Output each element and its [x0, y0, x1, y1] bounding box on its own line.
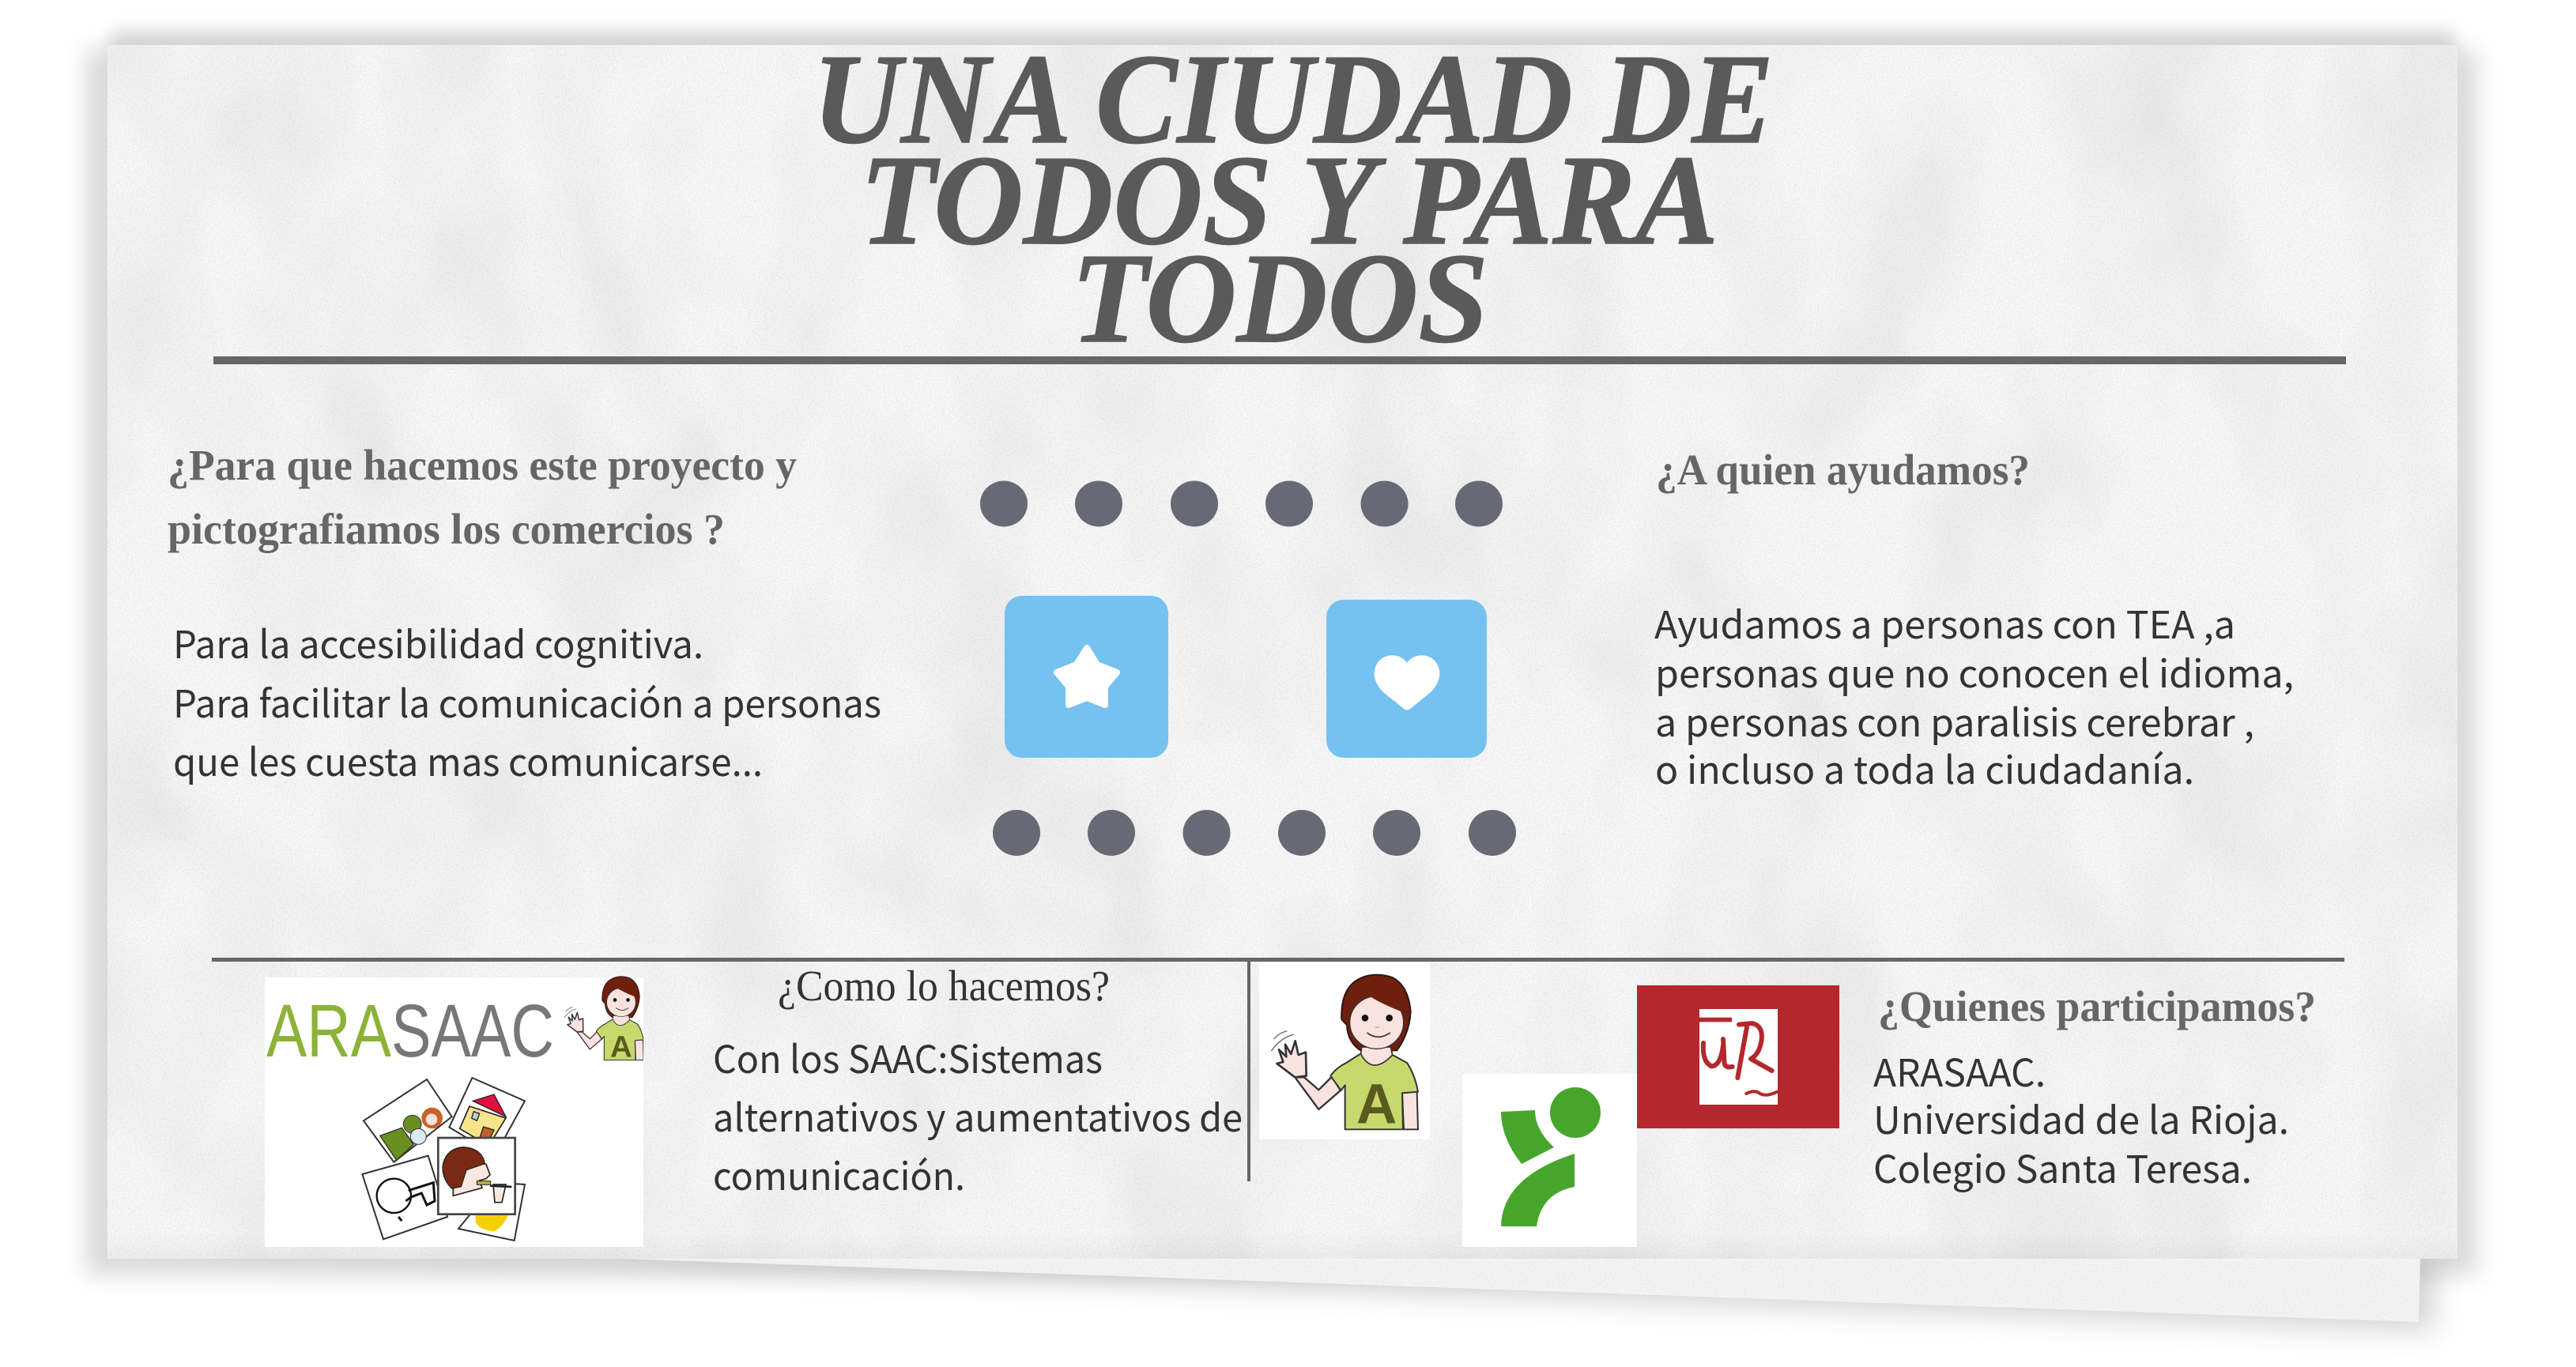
text: purpose body [173, 614, 881, 787]
title: UNA CIUDAD DE [813, 28, 1774, 171]
heading: participants: ¿Quienes participamos? [1878, 982, 2316, 1030]
heading: how we do it: ¿Como lo hacemos? [778, 962, 1110, 1010]
lower divider [212, 958, 2344, 962]
title rule [213, 356, 2346, 364]
logo wordmark: SAAC [391, 989, 554, 1073]
icon: small mascot [564, 977, 643, 1064]
text: how we do it body: Con los SAAC:Sistemas [713, 1029, 1103, 1084]
icon: scattered pictogram cards [362, 1078, 525, 1241]
title: TODOS Y PARA [860, 130, 1718, 272]
panel: participants [1873, 982, 2316, 1194]
heading: purpose: pictografiamos los comercios ? [168, 505, 725, 553]
panel: how we do it [713, 962, 1243, 1201]
text: who we help body [1654, 594, 2294, 795]
text: purpose body: Para facilitar la comunicación a personas [173, 673, 881, 729]
image: ARASAAC mascot: A [1356, 1074, 1397, 1136]
vertical divider [1247, 962, 1250, 1181]
panel: who we help [1654, 446, 2294, 795]
dots: top row [980, 480, 1503, 526]
logo wordmark [266, 989, 554, 1073]
text: who we help body: o incluso a toda la ciudadanía. [1655, 740, 2194, 795]
text: purpose body: que les cuesta mas comunicarse... [173, 732, 763, 787]
text: participants list: Universidad de la Rioja. [1873, 1090, 2289, 1145]
image: ARASAAC mascot [1259, 962, 1430, 1139]
text: participants list: ARASAAC. [1873, 1042, 2046, 1098]
text: purpose body: Para la accesibilidad cognitiva. [173, 614, 703, 669]
panel: purpose [168, 441, 881, 787]
heading: purpose: ¿Para que hacemos este proyecto y [168, 441, 797, 489]
icon: small mascot: A [610, 1030, 632, 1064]
text: how we do it body: comunicación. [713, 1146, 965, 1201]
image: ARASAAC logo with pictograms [265, 977, 643, 1247]
title: TODOS [1071, 228, 1488, 370]
text: who we help body: Ayudamos a personas con TEA ,a [1654, 594, 2235, 650]
text: how we do it body [713, 1029, 1243, 1201]
heading: who we help: ¿A quien ayudamos? [1656, 446, 2030, 494]
icon: heart card [1326, 600, 1487, 758]
text: how we do it body: alternativos y aumentativos de [713, 1087, 1243, 1143]
text: who we help body: personas que no conocen el idioma, [1655, 643, 2294, 699]
logo wordmark: ARA [266, 989, 392, 1073]
title [813, 28, 1774, 370]
image: Universidad de La Rioja logo [1637, 985, 1839, 1128]
dots: bottom row [993, 810, 1516, 856]
icon: star card [1005, 596, 1168, 758]
text: participants list: Colegio Santa Teresa. [1873, 1139, 2252, 1194]
image: green figure logo [1462, 1074, 1637, 1247]
text: who we help body: a personas con paralisis cerebrar , [1655, 692, 2254, 748]
heading: purpose [168, 441, 797, 553]
text: participants list [1873, 1042, 2289, 1194]
